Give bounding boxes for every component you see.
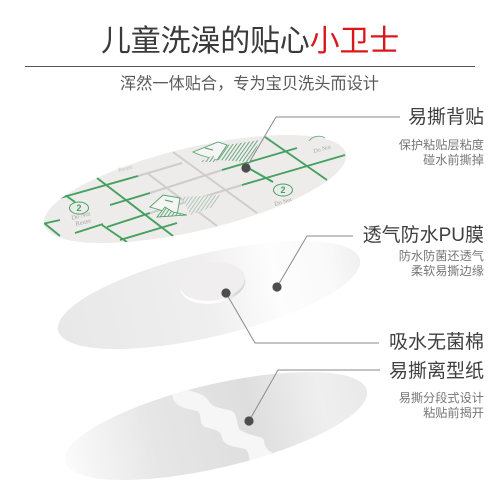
label: backing patch heading: 易撕背贴 <box>408 107 484 128</box>
label: backing patch description: 碰水前撕掉 <box>423 153 484 167</box>
label: PU film description: 柔软易撕边缘 <box>411 264 484 278</box>
leader line: backing patch <box>241 117 400 173</box>
top layer: printed backing patch <box>44 135 346 243</box>
green grid lines <box>42 137 345 242</box>
icon: number badge with Do Not Reuse text, left: 2 <box>76 203 82 213</box>
grey grid lines <box>138 152 257 226</box>
icon: number badge with Do Not Reuse text, left: Reuse <box>75 217 92 228</box>
middle layer: breathable film with absorbent pad <box>49 219 369 371</box>
title divider <box>25 66 475 67</box>
label: backing patch description: 保护粘贴层粘度 <box>399 138 484 152</box>
label: backing patch description <box>399 138 484 167</box>
icon: number badge, right <box>274 184 293 208</box>
absorbent cotton pad <box>177 258 248 308</box>
leader line: absorbent cotton <box>221 288 379 343</box>
label: release paper heading: 易撕离型纸 <box>389 361 484 382</box>
label: release paper description <box>399 391 484 420</box>
icon: badge arc and text, top right <box>309 136 332 155</box>
illustration: exploded patch layers <box>44 116 400 480</box>
icon: peel tab, upper <box>193 140 260 162</box>
subtitle: 浑然一体贴合，专为宝贝洗头而设计 <box>120 75 379 93</box>
icon: badge arc and text, top right: Do Not <box>313 144 332 155</box>
icon: number badge, right: 2 <box>280 185 286 195</box>
icon: number badge with Do Not Reuse text, left <box>70 202 92 228</box>
label: release paper description: 粘贴前揭开 <box>423 406 484 420</box>
icon: peel tab, lower <box>150 195 220 217</box>
label: absorbent cotton heading: 吸水无菌棉 <box>389 332 484 353</box>
icon: number badge with Do Not Reuse text, left: Do Not <box>71 210 91 222</box>
leader line: release paper <box>244 370 380 426</box>
icon: number badge, right: Do Not <box>274 197 293 208</box>
leader line: PU film <box>272 236 353 292</box>
bottom layer: release paper with wavy split <box>78 372 367 480</box>
label: PU film description <box>399 249 484 278</box>
wavy split strip <box>172 390 272 460</box>
title: 儿童洗澡的贴心小卫士 <box>101 25 399 58</box>
icon: faint reuse text, top: Reuse <box>118 164 134 174</box>
label: release paper description: 易撕分段式设计 <box>399 391 484 405</box>
label: PU film heading: 透气防水PU膜 <box>363 225 484 246</box>
label: PU film description: 防水防菌还透气 <box>399 249 484 263</box>
